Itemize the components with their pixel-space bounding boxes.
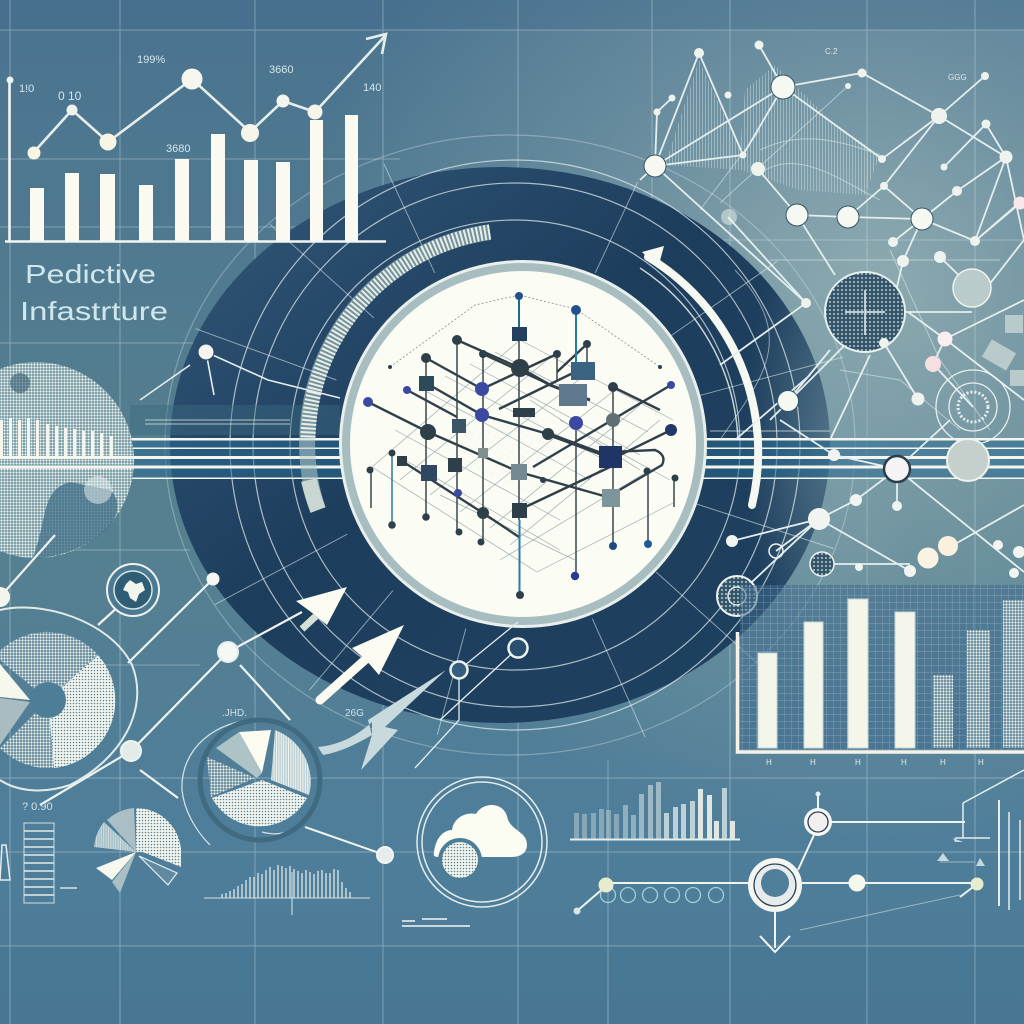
central disc with isometric network (339, 260, 707, 628)
bottom mini bar chart (570, 782, 740, 840)
axis tick labels: H (810, 758, 816, 767)
right axis fragments (800, 770, 1024, 930)
small bottom-right labels: GGG (948, 73, 967, 82)
title: Predictive Infrastructure (20, 259, 168, 326)
axis tick labels: H (855, 758, 861, 767)
chart value labels (19, 54, 381, 155)
axis tick labels: H (901, 758, 907, 767)
vertical node stems (371, 296, 674, 595)
upper-left ring node in the dark band (140, 344, 340, 400)
isometric floor grid (372, 295, 673, 572)
network nodes (366, 327, 678, 599)
pie chart 3 (94, 808, 181, 893)
small ring row (600, 888, 724, 902)
dotted ring hub (717, 576, 757, 616)
large concentric node (748, 858, 802, 912)
top-left bar and line chart (5, 34, 386, 242)
large dotted hub (825, 272, 905, 352)
bars (30, 115, 358, 241)
white arrow 1 (296, 587, 347, 629)
right bar chart (738, 585, 1024, 767)
pie chart labels: .JHD. (222, 708, 247, 719)
white arrow 2 (320, 625, 404, 700)
nodes (726, 449, 1024, 578)
chart value labels: 0 10 (58, 89, 82, 103)
small dotted hub (810, 552, 834, 576)
chart axes (5, 80, 386, 242)
grey highlight disc (947, 439, 989, 481)
ring node (884, 456, 910, 482)
network edges (640, 45, 1024, 440)
axis tick labels: H (766, 758, 772, 767)
right-middle network (717, 420, 1024, 616)
pale arrow 3 (318, 670, 446, 770)
small ring connector nodes near center (415, 622, 528, 768)
concentric hub (936, 370, 1010, 444)
central dark ring with polar grid (165, 135, 925, 755)
arc arrowhead (642, 246, 664, 268)
pie chart 1 with ring (0, 607, 137, 790)
title: Predictive Infrastructure: Infastrture (20, 296, 168, 326)
solid bars (758, 599, 915, 748)
hatched terrain surface (665, 60, 880, 195)
upper-right network diagram (640, 40, 1024, 444)
horizontal data bands (0, 405, 1024, 479)
stacked stripe chart: ? 0.90 (22, 801, 53, 813)
striped left gauge arc (307, 232, 490, 510)
legend dashes (402, 919, 470, 926)
small dotted hub (953, 269, 991, 307)
small ring icon (769, 544, 783, 558)
chart value labels: 3660 (269, 64, 293, 76)
stacked stripe chart (0, 801, 77, 903)
small bottom-right labels (825, 47, 967, 82)
icon: cloud in circle (417, 777, 547, 907)
axis tick labels (766, 758, 984, 767)
distribution histogram (204, 865, 370, 915)
dotted bars (933, 600, 1024, 748)
pie chart 2 with arcs (182, 720, 320, 845)
pale tiles on the right edge (982, 315, 1024, 386)
chart value labels: 140 (363, 82, 381, 94)
ring nodes and connectors at lower left (0, 535, 302, 805)
chart value labels: 3680 (166, 143, 190, 155)
white arc around the disc (640, 257, 758, 505)
chart value labels: 1!0 (19, 83, 34, 95)
axis tick labels: H (940, 758, 946, 767)
chart value labels: 199% (137, 54, 165, 66)
title: Predictive Infrastructure: Pedictive (25, 259, 156, 289)
chart axes (738, 632, 1024, 752)
globe with dotted surface (0, 362, 134, 560)
icon: ring with flower (107, 564, 159, 616)
small bottom-right labels: C.2 (825, 47, 838, 56)
trend line with arrow (6, 34, 386, 160)
pie chart labels: 26G (345, 708, 364, 719)
bottom-right flow diagram (574, 770, 1024, 952)
network nodes (644, 75, 933, 412)
connector to node (305, 827, 393, 863)
network links (368, 340, 671, 537)
axis tick labels: H (978, 758, 984, 767)
pie chart labels (222, 708, 364, 719)
